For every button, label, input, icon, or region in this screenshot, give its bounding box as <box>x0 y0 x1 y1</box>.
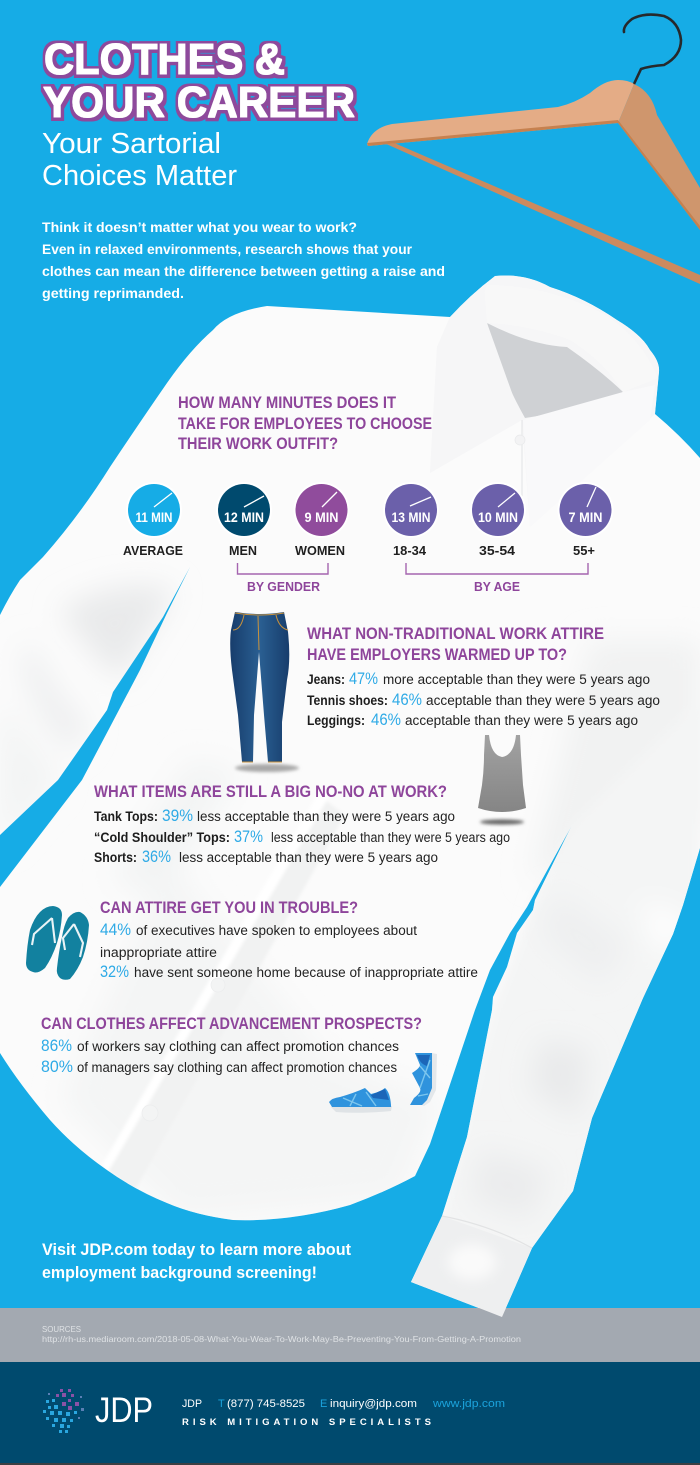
panel: non-traditional attire <box>307 625 660 729</box>
panel: advancement prospects: of managers say clothing can affect promotion chances <box>77 1060 397 1075</box>
panel: advancement prospects: 80% <box>41 1057 73 1076</box>
shirt shading: soft folds <box>0 586 700 1220</box>
contact details: JDP <box>182 1398 202 1410</box>
heading: minutes <box>178 394 432 453</box>
panel: non-traditional attire: 46% <box>371 710 401 729</box>
clock: average <box>123 482 183 558</box>
panel: no-no items: 36% <box>142 847 171 866</box>
panel: non-traditional attire: Leggings: <box>307 713 365 728</box>
logo: JDP dots <box>43 1389 84 1433</box>
panel: non-traditional attire: 47% <box>349 669 378 688</box>
panel: non-traditional attire: HAVE EMPLOYERS WARMED UP TO? <box>307 646 567 664</box>
clock: men <box>216 482 272 558</box>
contact details: (877) 745-8525 <box>227 1398 305 1410</box>
panel: no-no items: WHAT ITEMS ARE STILL A BIG NO-NO AT WORK? <box>94 783 447 801</box>
bracket: by age: BY AGE <box>474 579 520 594</box>
contact details: RISK MITIGATION SPECIALISTS <box>182 1417 431 1428</box>
intro text: clothes can mean the difference between getting a raise and <box>42 263 445 279</box>
clock: 55+: 55+ <box>573 543 595 558</box>
panel: no-no items: Tank Tops: <box>94 809 158 824</box>
hanger <box>367 15 700 284</box>
heading: minutes: THEIR WORK OUTFIT? <box>178 435 338 453</box>
panel: advancement prospects: of workers say clothing can affect promotion chances <box>77 1039 399 1054</box>
panel: non-traditional attire: WHAT NON-TRADITIONAL WORK ATTIRE <box>307 625 604 643</box>
clock: average: AVERAGE <box>123 543 183 558</box>
panel: non-traditional attire: acceptable than they were 5 years ago <box>426 693 660 708</box>
panel: no-no items: less acceptable than they were 5 years ago <box>197 809 455 824</box>
icon: jeans <box>230 612 299 772</box>
icon: tank top <box>478 735 526 825</box>
sources band <box>0 1308 700 1362</box>
title: YOUR CAREER <box>43 78 355 127</box>
subtitle <box>42 128 237 192</box>
panel: advancement prospects: 86% <box>41 1036 72 1055</box>
clock: women <box>294 482 350 558</box>
panel: attire trouble <box>100 899 478 981</box>
panel: non-traditional attire: more acceptable than they were 5 years ago <box>383 672 650 687</box>
panel: advancement prospects: CAN CLOTHES AFFECT ADVANCEMENT PROSPECTS? <box>41 1015 422 1033</box>
icon: flip flops <box>26 906 89 980</box>
clock: 35-54: 35-54 <box>479 543 516 558</box>
contact details: inquiry@jdp.com <box>330 1398 417 1410</box>
panel: no-no items: less acceptable than they were 5 years ago <box>271 830 510 845</box>
panel: attire trouble: 44% <box>100 920 131 939</box>
panel: non-traditional attire: Jeans: <box>307 672 345 687</box>
subtitle: Your Sartorial <box>42 128 221 160</box>
panel: no-no items: Shorts: <box>94 850 137 865</box>
intro text <box>42 219 445 301</box>
icon: sneakers <box>329 1053 437 1113</box>
panel: no-no items: 37% <box>234 827 263 846</box>
bracket: by gender <box>238 563 328 594</box>
call to action: Visit JDP.com today to learn more about <box>42 1240 351 1259</box>
buttons <box>142 978 225 1121</box>
panel: no-no items: less acceptable than they were 5 years ago <box>179 850 438 865</box>
clock: 35-54 <box>470 482 526 558</box>
left sleeve gap <box>0 567 190 887</box>
clock: men: 12 MIN <box>224 510 264 525</box>
title: CLOTHES & <box>44 35 285 84</box>
intro text: Think it doesn’t matter what you wear to work? <box>42 219 357 235</box>
clock chart <box>123 482 614 594</box>
title <box>43 35 355 127</box>
bracket: by age <box>406 563 588 594</box>
panel: non-traditional attire: acceptable than they were 5 years ago <box>405 713 638 728</box>
sources band: SOURCES <box>42 1324 81 1334</box>
panel: no-no items: 39% <box>162 806 193 825</box>
cuff <box>411 1216 532 1317</box>
panel: non-traditional attire: Tennis shoes: <box>307 693 388 708</box>
clock: 18-34 <box>383 482 439 558</box>
sources band: http://rh-us.mediaroom.com/2018-05-08-What-You-Wear-To-Work-May-Be-Preventing-You-From-Getting-A-Promotion <box>42 1334 521 1344</box>
clock: 55+: 7 MIN <box>568 510 602 525</box>
intro text: Even in relaxed environments, research shows that your <box>42 241 413 257</box>
call to action <box>42 1240 351 1282</box>
panel: non-traditional attire: 46% <box>392 690 422 709</box>
clock: average: 11 MIN <box>136 510 172 525</box>
intro text: getting reprimanded. <box>42 285 184 301</box>
clock: 18-34: 18-34 <box>393 543 427 558</box>
clock: women: 9 MIN <box>304 510 338 525</box>
clock: 55+ <box>558 482 614 558</box>
panel: attire trouble: 32% <box>100 962 129 981</box>
clock: men: MEN <box>229 543 257 558</box>
subtitle: Choices Matter <box>42 160 237 192</box>
shirt <box>0 270 700 1330</box>
clock: 35-54: 10 MIN <box>478 510 518 525</box>
contact details: T <box>218 1398 225 1410</box>
heading: minutes: HOW MANY MINUTES DOES IT <box>178 394 396 412</box>
heading: minutes: TAKE FOR EMPLOYEES TO CHOOSE <box>178 415 432 433</box>
panel: attire trouble: inappropriate attire <box>100 945 217 960</box>
panel: no-no items: “Cold Shoulder” Tops: <box>94 830 230 845</box>
panel: attire trouble: have sent someone home because of inappropriate attire <box>134 965 478 980</box>
contact details <box>182 1398 505 1428</box>
logo wordmark: JDP <box>95 1391 153 1430</box>
panel: attire trouble: CAN ATTIRE GET YOU IN TROUBLE? <box>100 899 358 917</box>
panel: attire trouble: of executives have spoken to employees about <box>136 923 417 938</box>
contact details: www.jdp.com <box>432 1398 505 1410</box>
footer <box>0 1362 700 1465</box>
panel: advancement prospects <box>41 1015 422 1076</box>
shirt shading: placket <box>102 790 345 1190</box>
panel: no-no items <box>94 783 510 866</box>
contact details: E <box>320 1398 327 1410</box>
call to action: employment background screening! <box>42 1263 317 1282</box>
clock: 18-34: 13 MIN <box>392 510 430 525</box>
bracket: by gender: BY GENDER <box>247 579 321 594</box>
clock: women: WOMEN <box>295 543 345 558</box>
right sleeve <box>411 828 700 1302</box>
collar <box>450 276 659 496</box>
